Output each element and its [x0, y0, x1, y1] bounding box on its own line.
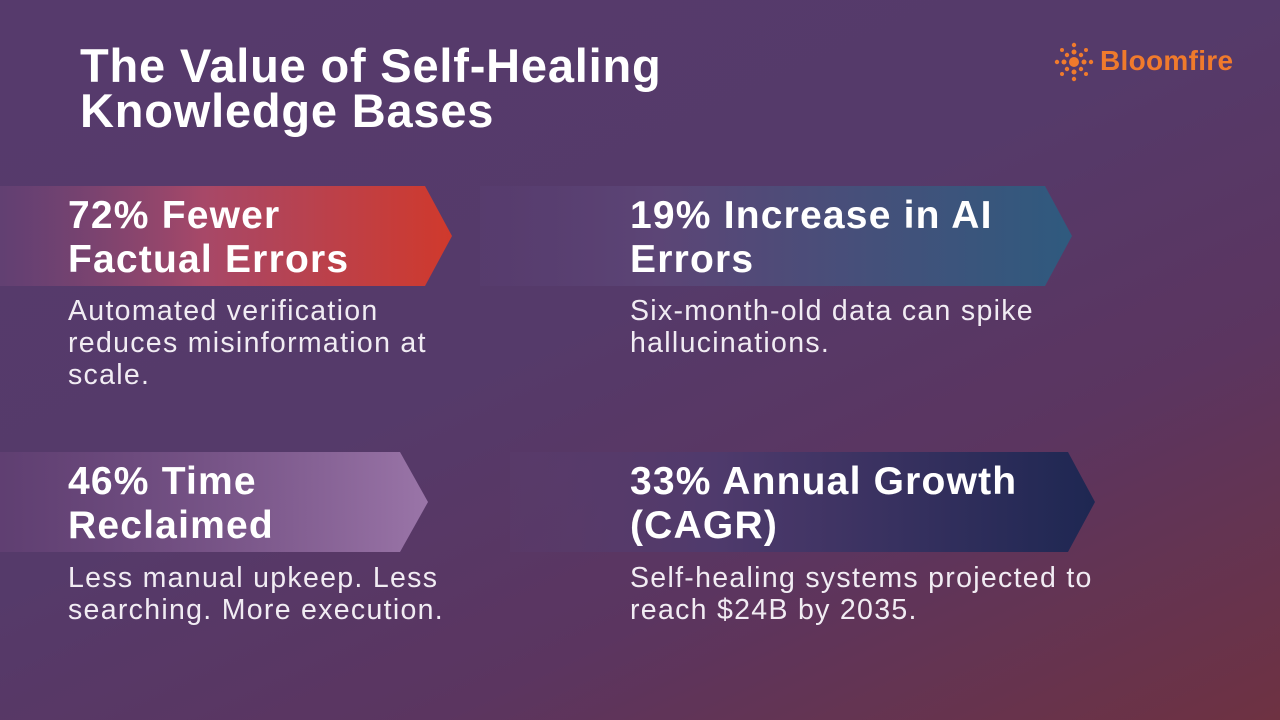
- heading 4: 33% Annual Growth: [630, 460, 1017, 503]
- text 2: [630, 295, 1034, 359]
- title: The Value of Self-Healing: [80, 39, 662, 92]
- heading 4: [630, 460, 1017, 547]
- heading 3: Reclaimed: [68, 504, 274, 547]
- text 1: [68, 295, 427, 391]
- title: Knowledge Bases: [80, 84, 494, 137]
- heading 3: [68, 460, 274, 547]
- heading 1: [68, 194, 349, 281]
- text 3: [68, 562, 444, 626]
- arrow banner 3: [0, 452, 428, 552]
- logo: Bloomfire: [1054, 42, 1233, 82]
- text 4: reach $24B by 2035.: [630, 594, 918, 626]
- arrow banner 2: [592, 186, 1072, 286]
- title: [80, 39, 662, 137]
- text 2: hallucinations.: [630, 327, 830, 359]
- heading 1: 72% Fewer: [68, 194, 280, 237]
- text 1: scale.: [68, 359, 150, 391]
- heading 3: 46% Time: [68, 460, 257, 503]
- heading 4: (CAGR): [630, 504, 778, 547]
- arrow banner 4: [646, 452, 1095, 552]
- text 4: [630, 562, 1093, 626]
- arrow banner 1: [0, 186, 452, 286]
- heading 2: [630, 194, 993, 281]
- heading 2: 19% Increase in AI: [630, 194, 993, 237]
- text 3: searching. More execution.: [68, 594, 444, 626]
- logo: Bloomfire: Bloomfire: [1100, 45, 1233, 76]
- text 3: Less manual upkeep. Less: [68, 562, 438, 594]
- heading 1: Factual Errors: [68, 238, 349, 281]
- heading 2: Errors: [630, 238, 754, 281]
- text 4: Self-healing systems projected to: [630, 562, 1093, 594]
- text 1: reduces misinformation at: [68, 327, 427, 359]
- text 2: Six-month-old data can spike: [630, 295, 1034, 327]
- text 1: Automated verification: [68, 295, 379, 327]
